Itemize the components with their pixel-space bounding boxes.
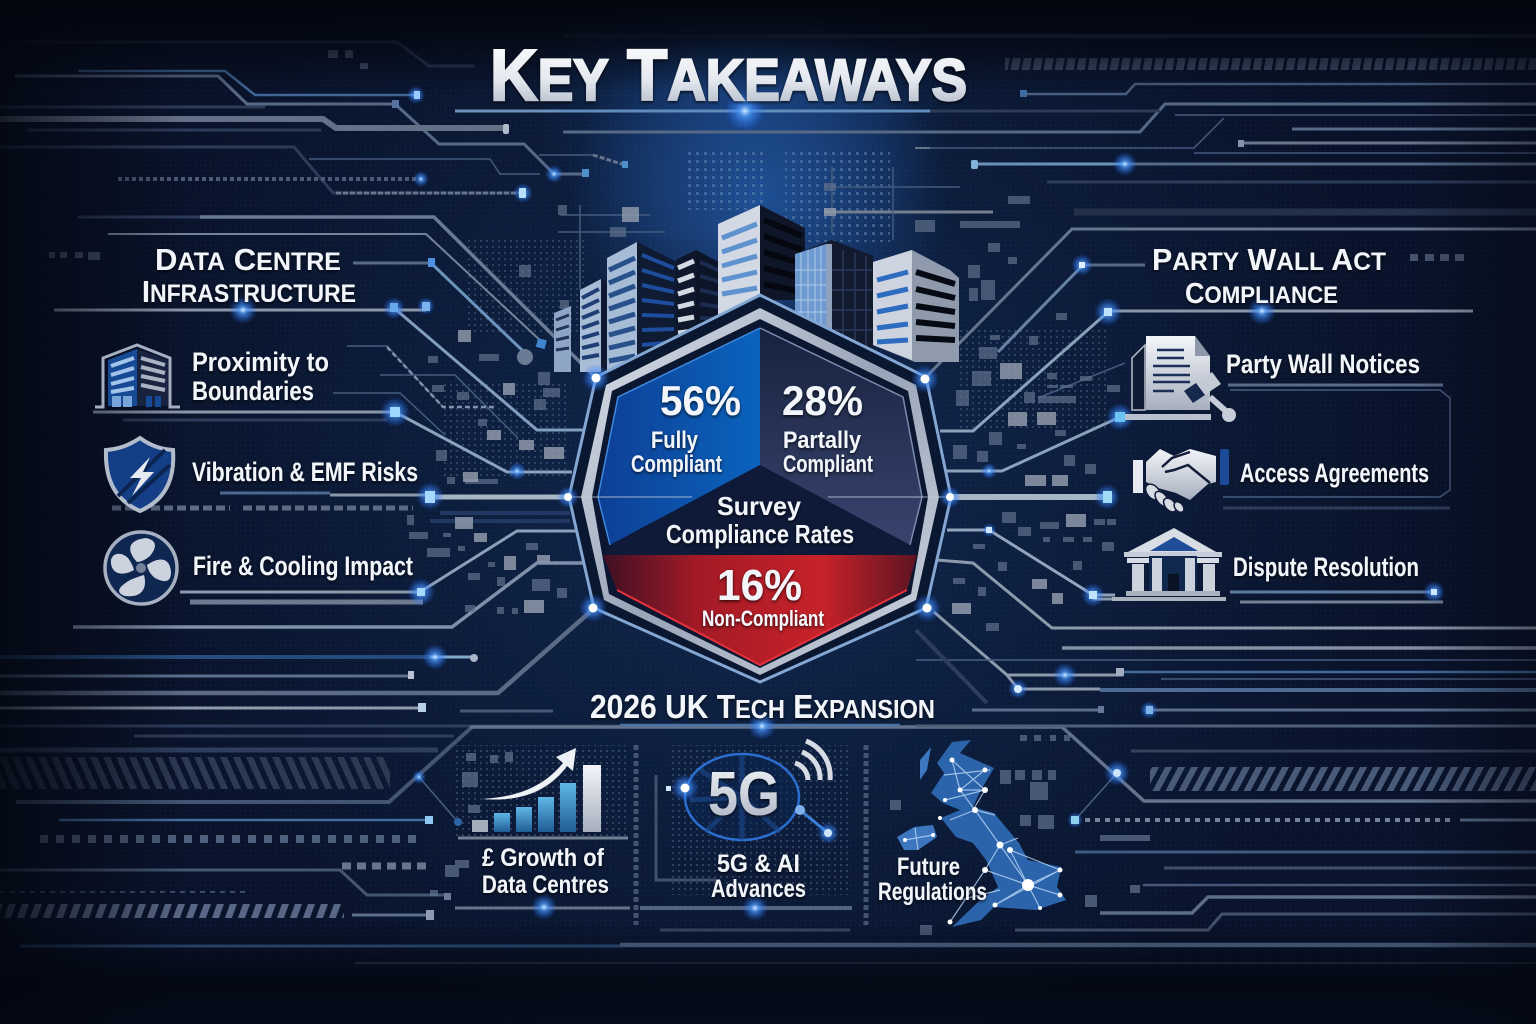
segment: non-compliant: Non-Compliant xyxy=(702,606,825,631)
building 6 xyxy=(873,250,959,362)
icon: handshake xyxy=(1133,449,1229,514)
panel: data centre infrastructure xyxy=(95,242,418,604)
label: dispute: Dispute Resolution xyxy=(1233,552,1419,582)
glow nodes xyxy=(229,86,1445,921)
compliance octagon xyxy=(557,295,961,682)
heading xyxy=(1152,242,1386,310)
label: future regulations: Regulations xyxy=(878,878,987,906)
icon: courthouse xyxy=(1112,528,1226,601)
segment: partially compliant xyxy=(760,328,922,545)
icon: building xyxy=(95,345,180,407)
label: growth: £ Growth of xyxy=(482,844,605,872)
label: 5g and ai: 5G & AI xyxy=(717,850,800,878)
segment: fully compliant: Compliant xyxy=(631,451,722,478)
label: vibration: Vibration & EMF Risks xyxy=(192,457,418,487)
building 3 xyxy=(676,250,730,345)
label: growth: Data Centres xyxy=(482,871,609,899)
segment: survey label: Compliance Rates xyxy=(666,519,854,549)
label: future regulations: Future xyxy=(897,853,960,881)
segment: non-compliant: 16% xyxy=(717,561,802,610)
segment: fully compliant xyxy=(598,328,760,545)
building 1 xyxy=(580,279,614,372)
label: future regulations xyxy=(878,853,987,906)
icon: document and gavel xyxy=(1125,336,1236,422)
building 4 xyxy=(718,205,805,318)
label: proximity: Boundaries xyxy=(192,376,314,406)
label: proximity: Proximity to xyxy=(192,347,329,377)
segment: partially compliant: Partally xyxy=(783,427,862,454)
building 2 xyxy=(607,242,677,372)
segment: survey label xyxy=(603,465,917,555)
title: KEY TAKEAWAYS xyxy=(490,36,967,116)
icon: 5G: 5G xyxy=(708,760,780,829)
label: notices: Party Wall Notices xyxy=(1226,349,1420,379)
heading: DATA CENTRE xyxy=(155,242,341,277)
segment: fully compliant: Fully xyxy=(651,427,699,454)
icon: uk map xyxy=(897,740,1066,927)
segment: non-compliant xyxy=(603,555,917,665)
heading: 2026 UK TECH EXPANSION xyxy=(590,688,935,725)
label: proximity xyxy=(192,347,329,406)
icon: growth chart xyxy=(472,748,601,832)
icon: 5G xyxy=(666,741,839,844)
heading: COMPLIANCE xyxy=(1185,278,1338,310)
segment: fully compliant: 56% xyxy=(660,377,741,424)
decorative data pixels xyxy=(49,50,1464,935)
label: fire and cooling: Fire & Cooling Impact xyxy=(193,551,413,581)
segment: survey label: Survey xyxy=(717,491,802,521)
panel: party wall act compliance xyxy=(1112,242,1429,601)
buildings xyxy=(554,205,959,372)
heading: INFRASTRUCTURE xyxy=(142,274,356,309)
icon: shield xyxy=(106,438,173,511)
segment: partially compliant: 28% xyxy=(782,377,863,424)
label: 5g and ai xyxy=(711,850,806,903)
octagon corner nodes xyxy=(557,364,961,622)
building: small far left xyxy=(554,306,571,372)
label: 5g and ai: Advances xyxy=(711,875,806,903)
panel: 2026 uk tech expansion xyxy=(472,688,1066,927)
heading: PARTY WALL ACT xyxy=(1152,242,1386,277)
segment: partially compliant: Compliant xyxy=(783,451,873,478)
label: access: Access Agreements xyxy=(1240,458,1429,488)
label: growth xyxy=(482,844,609,899)
building 5 xyxy=(795,240,873,360)
icon: fan xyxy=(105,532,177,604)
heading xyxy=(142,242,356,309)
